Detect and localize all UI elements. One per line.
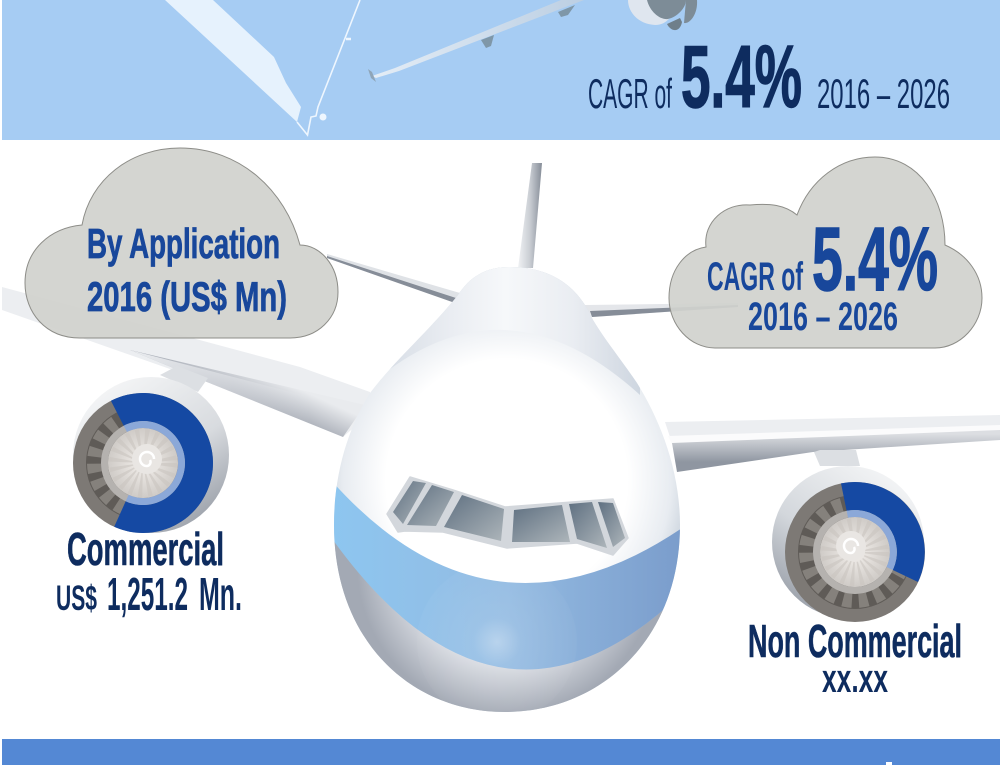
fuselage — [330, 262, 685, 722]
runway shape — [165, 0, 360, 135]
top CAGR text: 5.4% — [681, 27, 802, 126]
blue stripe — [330, 479, 685, 670]
right engine — [772, 450, 925, 622]
label: commercial: Mn. — [199, 568, 242, 620]
panel: top banner — [2, 0, 1000, 140]
aeroplane wing seen from above — [368, 0, 697, 82]
right stabilizer — [585, 303, 738, 317]
cockpit windows — [387, 477, 628, 555]
cloud CAGR text — [707, 210, 938, 339]
left engine — [73, 366, 229, 533]
cloud: CAGR — [669, 157, 982, 348]
aeroplane front view — [2, 163, 1000, 722]
label: commercial: Commercial — [67, 523, 224, 575]
right wing — [665, 415, 1000, 472]
label: non commercial: xx.xx — [822, 657, 888, 701]
top CAGR text: CAGR of — [588, 70, 672, 117]
blue share ring: non commercial — [841, 482, 925, 582]
cloud CAGR text: CAGR of — [707, 255, 803, 299]
heading: by application: By Application — [87, 220, 280, 267]
top CAGR text — [588, 27, 950, 126]
label: commercial: US$ — [56, 579, 97, 618]
nose cap — [390, 267, 640, 395]
heading: by application — [87, 220, 287, 320]
blue share ring: commercial — [111, 393, 213, 533]
left stabilizer — [327, 254, 460, 303]
left wing — [2, 287, 372, 437]
label: commercial — [56, 523, 242, 620]
cloud: by application — [25, 148, 338, 338]
heading: by application: 2016 (US$ Mn) — [87, 273, 287, 320]
cloud CAGR text: 2016 – 2026 — [748, 295, 898, 339]
label: non commercial — [748, 615, 962, 701]
lower fuselage — [334, 542, 663, 712]
tail fin — [518, 163, 542, 268]
label: commercial: 1,251.2 — [107, 568, 188, 620]
panel: bottom banner — [2, 739, 1000, 765]
